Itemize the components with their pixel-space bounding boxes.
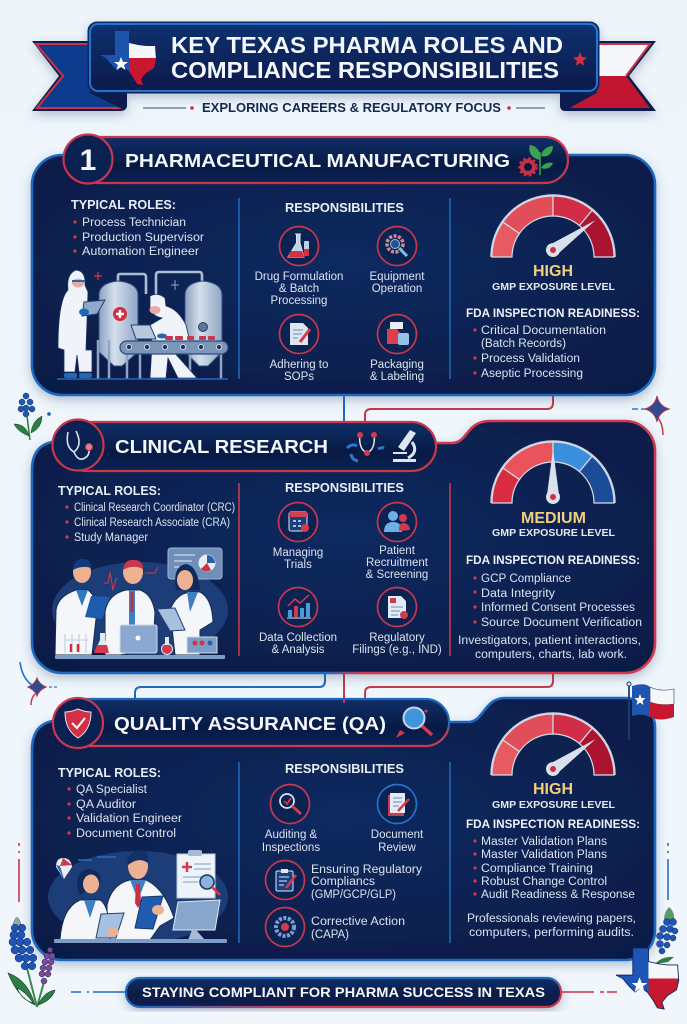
- header: quality assurance: QUALITY ASSURANCE (QA): [114, 713, 386, 734]
- icon: flask: [280, 226, 318, 266]
- typical roles: Study Manager: [74, 532, 148, 544]
- responsibilities: Review: [378, 842, 417, 854]
- responsibilities: & Analysis: [271, 644, 325, 656]
- icon: dashed side line left: [18, 843, 20, 902]
- typical roles: QA Specialist: [76, 784, 148, 796]
- responsibilities: & Screening: [366, 569, 428, 581]
- text: corrective action: [311, 916, 405, 941]
- title text: KEY TEXAS PHARMA ROLES AND: [171, 32, 563, 58]
- FDA inspection readiness: [466, 306, 640, 380]
- responsibilities: SOPs: [284, 371, 314, 383]
- responsibilities: [262, 761, 424, 946]
- icon: red star: [573, 52, 587, 66]
- typical roles: Automation Engineer: [82, 246, 199, 258]
- header: pharmaceutical manufacturing: 1: [80, 144, 96, 177]
- responsibilities: Managing: [273, 547, 323, 559]
- header: pharmaceutical manufacturing: PHARMACEUTICAL MANUFACTURING: [125, 150, 510, 171]
- icon: corrective action gear: [266, 908, 304, 946]
- responsibilities: [259, 480, 442, 656]
- title banner: [32, 22, 656, 115]
- icon: compliance clipboard: [266, 860, 304, 900]
- icon: gear and magnifier: [378, 226, 416, 266]
- icon: document review: [378, 784, 416, 824]
- GMP exposure level label: [492, 781, 616, 811]
- typical roles: Validation Engineer: [76, 813, 182, 825]
- responsibilities: Packaging: [370, 359, 424, 371]
- typical roles: TYPICAL ROLES:: [58, 765, 161, 780]
- subtitle: EXPLORING CAREERS & REGULATORY FOCUS: [202, 100, 501, 115]
- responsibilities: Document: [371, 829, 424, 841]
- illustration note: [458, 635, 641, 661]
- text: ensuring regulatory compliance: Compliancs: [311, 876, 375, 888]
- illustration note: [467, 913, 636, 939]
- illustration: clinical team: [52, 548, 228, 659]
- responsibilities: RESPONSIBILITIES: [285, 200, 404, 215]
- typical roles: TYPICAL ROLES:: [71, 197, 176, 212]
- FDA inspection readiness: Robust Change Control: [481, 876, 607, 888]
- typical roles: [71, 197, 204, 258]
- gauge: high GMP exposure: [491, 713, 615, 779]
- responsibilities: Patient: [379, 545, 416, 557]
- GMP exposure level label: HIGH: [533, 781, 573, 798]
- icon: bluebonnet top left: [14, 393, 51, 440]
- FDA inspection readiness: (Batch Records): [481, 338, 566, 350]
- illustration note: computers, performing audits.: [469, 927, 634, 939]
- icon: audit magnifier: [270, 784, 310, 824]
- text: ensuring regulatory compliance: (GMP/GCP/GLP): [311, 889, 396, 901]
- header: pharmaceutical manufacturing: [64, 134, 568, 184]
- panel: clinical research: [32, 420, 655, 673]
- icon: bluebonnets bottom right: [655, 907, 678, 964]
- responsibilities: Equipment: [370, 271, 425, 283]
- header: quality assurance: [53, 698, 449, 748]
- icon: dashed side line right: [667, 843, 669, 900]
- text: ensuring regulatory compliance: [311, 864, 422, 901]
- icon: sparkle left: [20, 662, 57, 705]
- panel: pharmaceutical manufacturing: [32, 134, 655, 395]
- title text: COMPLIANCE RESPONSIBILITIES: [171, 57, 559, 83]
- responsibilities: Trials: [284, 559, 312, 571]
- GMP exposure level label: MEDIUM: [521, 510, 586, 527]
- GMP exposure level label: [492, 263, 616, 293]
- text: corrective action: Corrective Action: [311, 916, 405, 928]
- FDA inspection readiness: Audit Readiness & Response: [481, 889, 635, 901]
- typical roles: Production Supervisor: [82, 232, 204, 244]
- responsibilities: [255, 200, 425, 383]
- FDA inspection readiness: Process Validation: [481, 353, 580, 365]
- illustration: QA reviewers: [48, 850, 228, 943]
- FDA inspection readiness: Aseptic Processing: [481, 368, 583, 380]
- typical roles: Clinical Research Coordinator (CRC): [74, 502, 235, 514]
- responsibilities: & Labeling: [370, 371, 424, 383]
- gauge: medium GMP exposure: [491, 441, 615, 504]
- illustration note: Professionals reviewing papers,: [467, 913, 636, 925]
- icon: bluebonnets bottom left: [8, 918, 55, 1007]
- icon: regulatory filing: [378, 588, 416, 626]
- footer banner: [71, 978, 617, 1007]
- icon: gear and plant: [520, 145, 553, 176]
- FDA inspection readiness: [466, 817, 640, 901]
- icon: document and pen: [280, 314, 318, 354]
- connector lines: [135, 395, 553, 703]
- FDA inspection readiness: [466, 553, 642, 629]
- FDA inspection readiness: Source Document Verification: [481, 617, 642, 629]
- header: clinical research: [52, 420, 436, 471]
- typical roles: Document Control: [76, 828, 176, 840]
- icon: stethoscope and microscope: [347, 430, 416, 462]
- typical roles: QA Auditor: [76, 799, 136, 811]
- typical roles: Process Technician: [82, 217, 186, 229]
- FDA inspection readiness: Informed Consent Processes: [481, 602, 635, 614]
- responsibilities: Adhering to: [270, 359, 328, 371]
- icon: patients: [378, 502, 416, 542]
- responsibilities: & Batch: [279, 283, 319, 295]
- title text: [171, 32, 563, 83]
- FDA inspection readiness: GCP Compliance: [481, 573, 571, 585]
- icon: Texas map bottom right: [616, 948, 682, 1012]
- FDA inspection readiness: Critical Documentation: [481, 325, 606, 337]
- icon: bar chart: [278, 588, 318, 626]
- typical roles: Clinical Research Associate (CRA): [74, 517, 230, 529]
- header: clinical research: CLINICAL RESEARCH: [115, 436, 328, 457]
- FDA inspection readiness: FDA INSPECTION READINESS:: [466, 553, 640, 567]
- responsibilities: RESPONSIBILITIES: [285, 480, 404, 495]
- icon: Texas flag map: [100, 31, 156, 85]
- illustration: technicians and tanks: [57, 270, 228, 379]
- responsibilities: Operation: [372, 283, 422, 295]
- FDA inspection readiness: Master Validation Plans: [481, 849, 607, 861]
- responsibilities: Processing: [271, 295, 327, 307]
- text: corrective action: (CAPA): [311, 929, 349, 941]
- typical roles: TYPICAL ROLES:: [58, 483, 161, 498]
- GMP exposure level label: [492, 510, 616, 539]
- icon: Texas flag on pole: [627, 682, 674, 740]
- gauge: high GMP exposure: [491, 195, 615, 260]
- icon: packaging: [378, 314, 416, 354]
- icon: sparkle top right: [632, 396, 669, 435]
- typical roles: [58, 483, 235, 544]
- illustration note: Investigators, patient interactions,: [458, 635, 641, 647]
- FDA inspection readiness: Data Integrity: [481, 588, 555, 600]
- GMP exposure level label: HIGH: [533, 263, 573, 280]
- GMP exposure level label: GMP EXPOSURE LEVEL: [492, 799, 616, 811]
- responsibilities: RESPONSIBILITIES: [285, 761, 404, 776]
- GMP exposure level label: GMP EXPOSURE LEVEL: [492, 281, 616, 293]
- GMP exposure level label: GMP EXPOSURE LEVEL: [492, 527, 616, 539]
- FDA inspection readiness: Master Validation Plans: [481, 836, 607, 848]
- typical roles: [58, 765, 182, 840]
- icon: magnifier: [396, 708, 432, 738]
- panel: quality assurance: [32, 698, 655, 960]
- text: ensuring regulatory compliance: Ensuring Regulatory: [311, 864, 422, 876]
- responsibilities: Regulatory: [369, 632, 425, 644]
- responsibilities: Drug Formulation: [255, 271, 343, 283]
- responsibilities: Data Collection: [259, 632, 337, 644]
- illustration note: computers, charts, lab work.: [475, 649, 627, 661]
- FDA inspection readiness: Compliance Training: [481, 863, 593, 875]
- responsibilities: Inspections: [262, 842, 320, 854]
- responsibilities: Auditing &: [265, 829, 318, 841]
- FDA inspection readiness: FDA INSPECTION READINESS:: [466, 817, 640, 831]
- responsibilities: Filings (e.g., IND): [352, 644, 442, 656]
- icon: calendar: [278, 502, 318, 542]
- FDA inspection readiness: FDA INSPECTION READINESS:: [466, 306, 640, 320]
- footer banner: STAYING COMPLIANT FOR PHARMA SUCCESS IN TEXAS: [142, 985, 545, 1000]
- responsibilities: Recruitment: [366, 557, 429, 569]
